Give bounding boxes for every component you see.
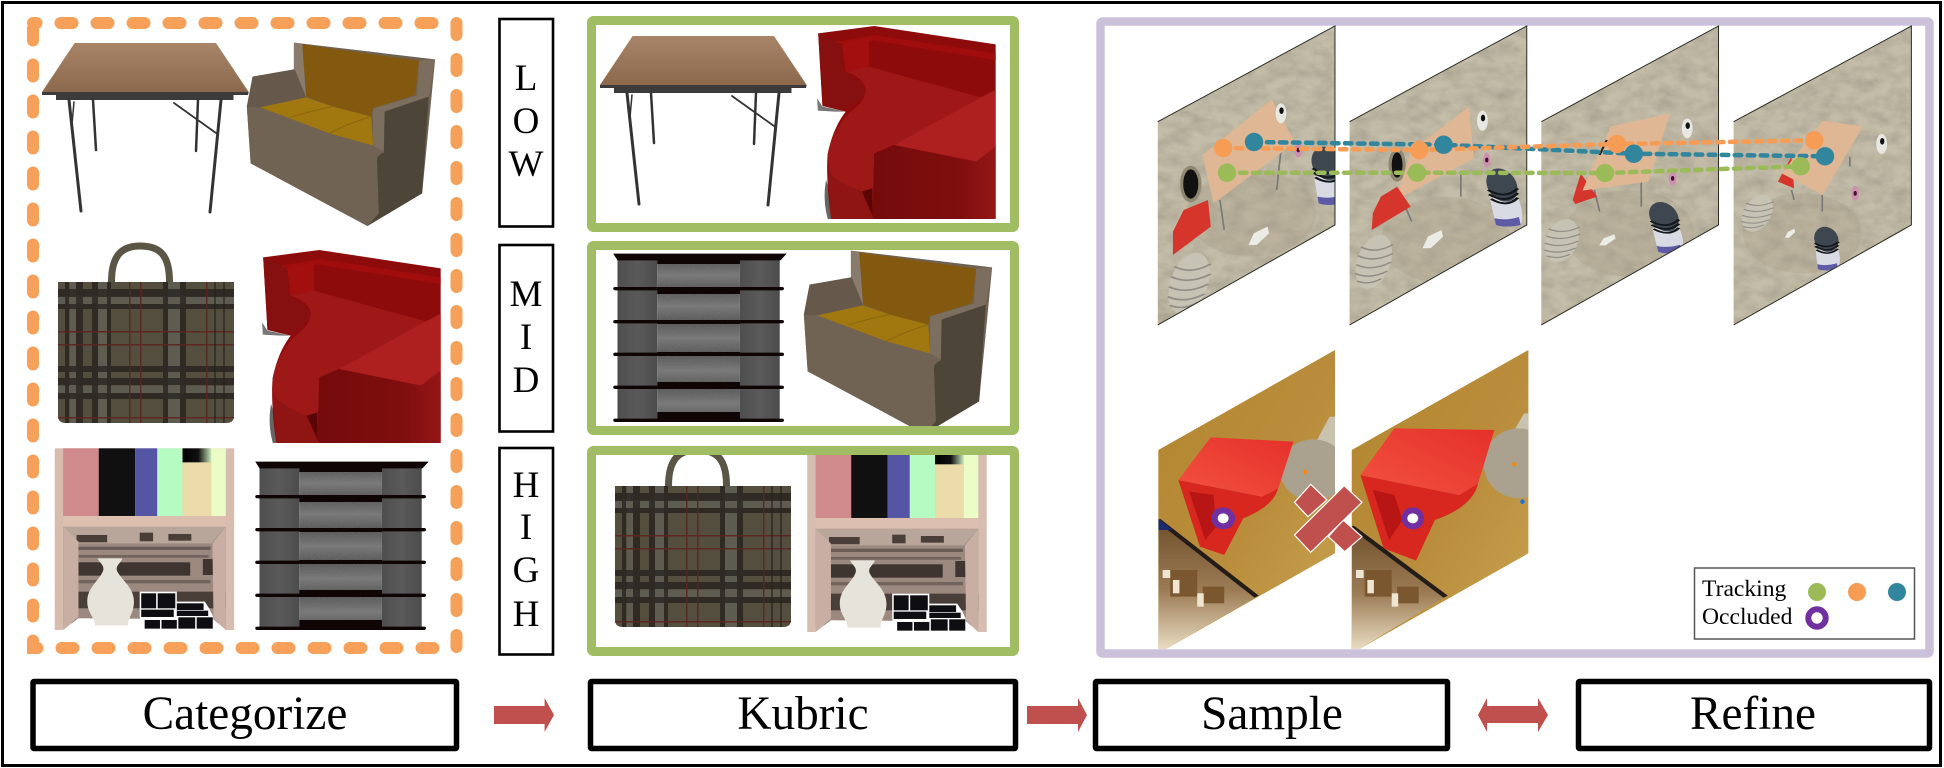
tracking points <box>1214 131 1834 182</box>
dashed orange frame <box>33 23 456 648</box>
legend: Tracking <box>1702 576 1787 602</box>
frame 2 <box>1350 26 1527 325</box>
rejection cross icon <box>1294 484 1362 552</box>
object: bookshelf <box>807 450 987 632</box>
white mask behind objects <box>596 455 1010 652</box>
step label: categorize <box>33 682 456 748</box>
object: plaid bag <box>615 450 791 627</box>
object: sofa <box>247 43 435 226</box>
frame 4 <box>1734 26 1911 325</box>
occluded marker B <box>1401 507 1424 529</box>
complexity label: mid: M <box>510 274 542 315</box>
complexity label: mid: D <box>513 360 539 401</box>
frame 1 <box>1158 26 1349 325</box>
step label: sample <box>1096 682 1448 748</box>
green track <box>1227 166 1801 173</box>
frame B <box>1352 350 1528 649</box>
complexity label: mid: I <box>520 317 532 358</box>
green frame <box>592 246 1014 430</box>
green frame <box>592 450 1014 652</box>
arrow: sample and refine loop <box>1478 698 1548 732</box>
legend <box>1694 568 1914 639</box>
complexity label: low <box>500 19 553 226</box>
object: plaid bag <box>58 246 234 423</box>
complexity label: high: H <box>513 465 539 506</box>
object: red corner sofa <box>262 250 441 443</box>
video frames: tracked sequence <box>1158 26 1911 325</box>
green frame <box>592 20 1014 228</box>
step label: refine: Refine <box>1690 688 1816 740</box>
panel: kubric low <box>592 20 1014 228</box>
step label: kubric: Kubric <box>737 688 869 740</box>
step label: categorize: Categorize <box>143 688 347 740</box>
complexity label: high: G <box>513 550 539 591</box>
blue track <box>1254 142 1825 156</box>
step label: kubric <box>590 682 1016 748</box>
object: folding table <box>600 36 807 205</box>
arrow: kubric to sample <box>1027 698 1087 732</box>
complexity label: low: L <box>515 58 537 99</box>
panel: kubric high <box>592 450 1014 652</box>
panel: kubric mid <box>592 246 1014 434</box>
complexity label: high: H <box>513 594 539 635</box>
complexity label: high <box>500 448 553 654</box>
panel: categorize <box>33 23 456 648</box>
object: grey rack <box>255 462 429 630</box>
object: folding table <box>42 43 249 212</box>
object: bookshelf <box>55 448 234 630</box>
step label: sample: Sample <box>1201 688 1343 740</box>
arrow: categorize to kubric <box>494 698 554 732</box>
complexity label: high: I <box>520 507 532 548</box>
object: grey rack <box>613 254 787 422</box>
complexity label: mid <box>500 245 553 432</box>
orange track <box>1223 140 1814 150</box>
legend: Occluded <box>1702 604 1793 630</box>
object: red corner sofa <box>817 26 996 219</box>
step label: refine <box>1578 682 1930 748</box>
frame 3 <box>1541 26 1719 325</box>
panel: sample and refine <box>1100 22 1930 654</box>
complexity label: low: O <box>513 101 539 142</box>
video frames: rejected occluded pair <box>1158 350 1554 649</box>
occluded marker A <box>1211 507 1235 529</box>
tracking trajectories <box>1223 140 1825 173</box>
complexity label: low: W <box>509 144 544 185</box>
frame A <box>1158 350 1347 649</box>
object: sofa <box>804 251 992 434</box>
